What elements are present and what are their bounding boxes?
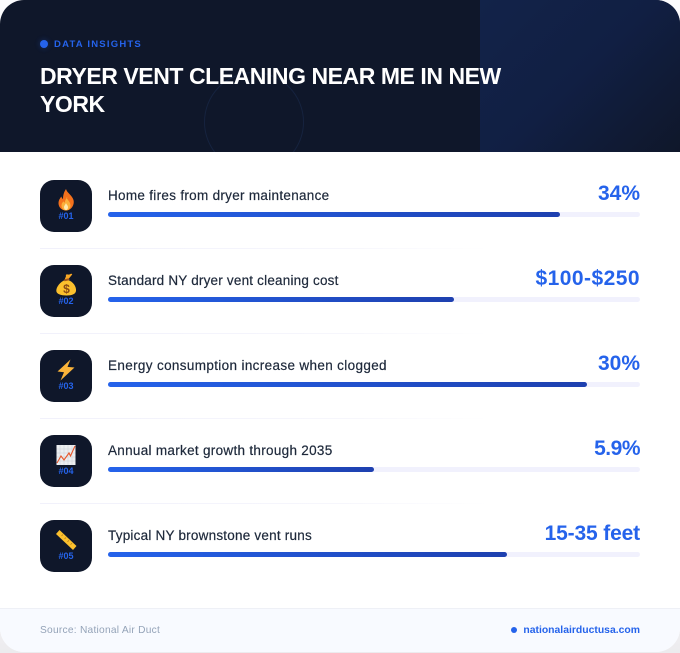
progress bar 50% bbox=[108, 467, 640, 472]
rank #04: #04 bbox=[58, 466, 74, 476]
icon: money bag bbox=[40, 265, 92, 317]
progress bar 65% bbox=[108, 297, 640, 302]
icon: chart bbox=[40, 435, 92, 487]
row: market growth bbox=[40, 435, 640, 487]
row: home fires bbox=[40, 180, 640, 232]
header decorative ring bbox=[204, 72, 304, 172]
title: DRYER VENT CLEANING NEAR ME IN NEW bbox=[40, 63, 501, 89]
row: energy consumption bbox=[40, 350, 640, 402]
progress bar 75% bbox=[108, 552, 640, 557]
progress bar 85% bbox=[108, 212, 640, 217]
value: 5.9% bbox=[594, 437, 640, 460]
icon: money bag: $ bbox=[63, 282, 70, 296]
title: YORK bbox=[40, 91, 105, 117]
icon: fire bbox=[40, 180, 92, 232]
value: $100-$250 bbox=[536, 267, 640, 290]
progress bar 90% bbox=[108, 382, 640, 387]
icon: ruler bbox=[40, 520, 92, 572]
value: 15-35 feet bbox=[545, 522, 640, 545]
panel: header bbox=[0, 0, 680, 152]
label: Typical NY brownstone vent runs bbox=[108, 528, 312, 543]
label: Home fires from dryer maintenance bbox=[108, 188, 329, 203]
website link: nationalairductusa.com bbox=[523, 625, 640, 636]
icon: lightning bbox=[40, 350, 92, 402]
label: Standard NY dryer vent cleaning cost bbox=[108, 273, 339, 288]
title bbox=[40, 63, 502, 117]
source: Source: National Air Duct bbox=[40, 625, 160, 636]
label: Energy consumption increase when clogged bbox=[108, 358, 387, 373]
value: 34% bbox=[598, 182, 640, 205]
eyebrow: data insights: DATA INSIGHTS bbox=[54, 39, 142, 50]
rank #02: #02 bbox=[58, 296, 74, 306]
rank #05: #05 bbox=[58, 551, 74, 561]
row: cleaning cost bbox=[40, 265, 640, 317]
panel: footer bbox=[0, 608, 680, 652]
header gradient panel bbox=[480, 0, 680, 152]
value: 30% bbox=[598, 352, 640, 375]
label: Annual market growth through 2035 bbox=[108, 443, 333, 458]
rank #03: #03 bbox=[58, 381, 74, 391]
rank #01: #01 bbox=[58, 211, 74, 221]
row: vent runs bbox=[40, 520, 640, 572]
